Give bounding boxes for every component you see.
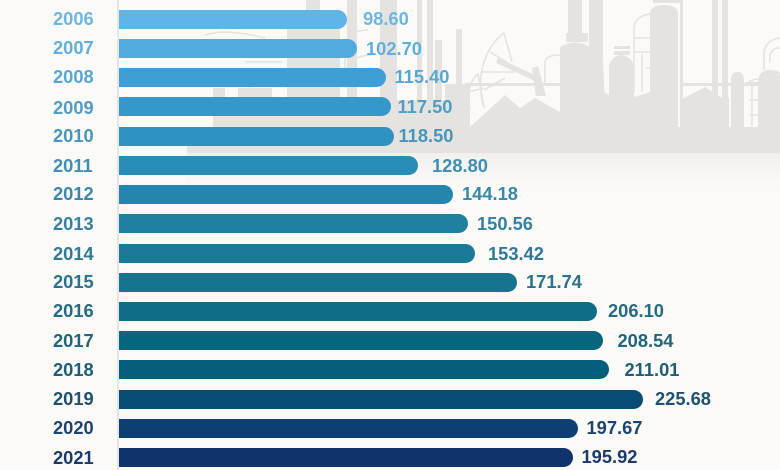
row 2020: 197.67 (586, 416, 642, 438)
row 2018 (53, 359, 679, 380)
row 2015: 171.74 (526, 270, 582, 292)
row 2006 (53, 8, 409, 29)
row 2008: 2008 (53, 66, 94, 87)
row 2021 (53, 446, 637, 468)
row 2008 (53, 66, 449, 87)
row 2009: 2009 (53, 97, 94, 118)
row 2010: 2010 (53, 124, 94, 146)
row 2021: 2021 (53, 447, 94, 468)
row 2006: 98.60 (363, 8, 409, 28)
row 2013 (53, 213, 533, 234)
row 2017: 208.54 (618, 330, 673, 351)
pipes (465, 83, 560, 86)
row 2012: 144.18 (462, 183, 518, 204)
row 2008: 115.40 (394, 66, 449, 87)
row 2015 (53, 270, 582, 292)
row 2013: 2013 (53, 213, 94, 234)
row 2018: 2018 (53, 359, 94, 380)
row 2011: 2011 (53, 154, 93, 176)
row 2019: 225.68 (655, 388, 711, 408)
row 2011 (53, 154, 488, 176)
axis line (117, 0, 119, 470)
row 2017 (53, 330, 674, 351)
row 2009: 117.50 (398, 96, 452, 117)
row 2014 (53, 242, 544, 264)
row 2018: 211.01 (624, 359, 679, 380)
row 2019 (53, 388, 711, 409)
pump beam (496, 58, 537, 81)
row 2017: 2017 (53, 330, 94, 351)
left columns (213, 88, 225, 102)
row 2012: 2012 (53, 183, 94, 204)
row 2010 (53, 124, 453, 146)
row 2019: 2019 (53, 388, 94, 408)
row 2007: 2007 (53, 36, 94, 58)
row 2013: 150.56 (477, 213, 533, 234)
reflection (187, 153, 780, 189)
pumpjack and pipe outlines (205, 14, 780, 126)
row 2020 (53, 416, 642, 438)
row 2007 (53, 36, 422, 58)
base mass (187, 95, 780, 153)
row 2009 (53, 96, 452, 118)
row 2016: 206.10 (608, 300, 664, 320)
row 2020: 2020 (53, 416, 94, 438)
row 2014: 2014 (53, 242, 94, 264)
row 2011: 128.80 (432, 154, 488, 176)
row 2016: 2016 (53, 300, 94, 320)
row 2021: 195.92 (582, 446, 637, 467)
row 2007: 102.70 (366, 38, 422, 58)
row 2012 (53, 183, 518, 204)
row 2014: 153.42 (488, 242, 544, 264)
row 2015: 2015 (53, 270, 94, 292)
row 2010: 118.50 (398, 124, 453, 146)
row 2006: 2006 (53, 8, 94, 28)
row 2016 (53, 300, 664, 321)
